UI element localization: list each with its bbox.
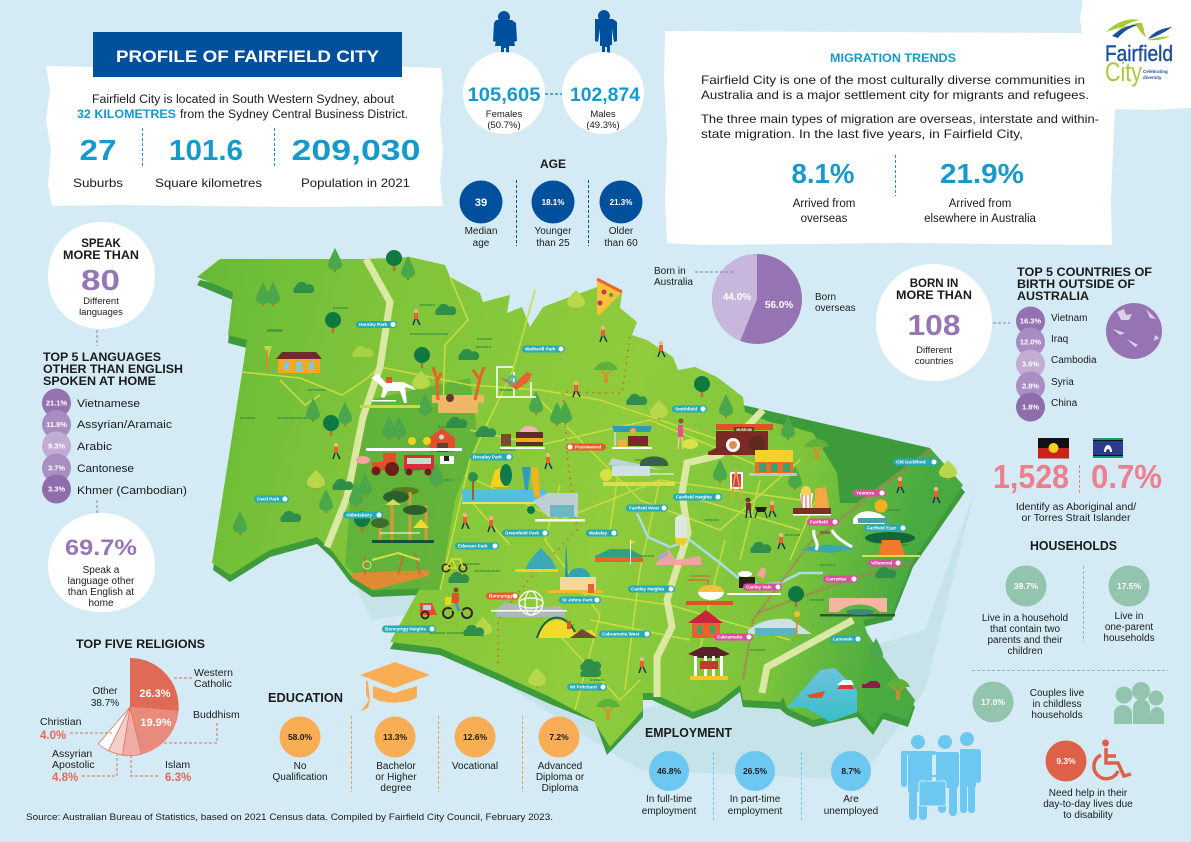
label: assyrian apostolic: [52, 748, 95, 784]
location labels: St Johns Park: [562, 598, 593, 603]
migration text: state migration. In the last five years, in Fairfield City,: [701, 127, 1023, 141]
stat: full-time: employment: [642, 806, 696, 817]
stat: square kilometres: 101.6: [169, 135, 243, 167]
stat: two parents: Live in a household: [982, 613, 1068, 624]
panel: 69.7% speak another language: 69.7%: [65, 535, 137, 560]
panel: females: Females: [486, 109, 522, 120]
language circles: 21.1%: [46, 398, 67, 408]
panel: born in more than 108 countries: MORE THAN: [896, 290, 972, 302]
heading: top 5 countries: AUSTRALIA: [1017, 291, 1089, 303]
illustration: wire sphere sculpture: [491, 591, 567, 617]
stat: arrived from elsewhere: [924, 158, 1037, 225]
older than 60: [600, 180, 642, 249]
location labels: Greenfield Park: [505, 531, 539, 536]
stat: one parent: one-parent: [1105, 622, 1153, 633]
location labels: Horsley Park: [359, 322, 388, 327]
icon: workers: [901, 732, 981, 820]
panel: males: Males: [590, 109, 616, 120]
stat: childless couples: 17.0%: [981, 697, 1005, 707]
panel: females: (50.7%): [487, 120, 521, 131]
illustration: tractor and trailer: [356, 453, 454, 476]
panel: born in more than 108 countries: [876, 264, 992, 381]
illustration: barbecue man: [746, 498, 767, 518]
stat: disability: [1043, 740, 1133, 821]
stat: disability: 9.3%: [1056, 756, 1076, 766]
illustration: heritage house: [264, 346, 322, 373]
label: born in Australia: Australia: [654, 277, 693, 288]
icon: woman: [493, 11, 517, 60]
older than 60: than 60: [604, 238, 638, 249]
stat: one parent: households: [1103, 633, 1155, 644]
intro text: Fairfield City is located in South Western Sydney, about: [92, 94, 395, 106]
country names: [1051, 313, 1097, 409]
illustration: pyramid pavilion: [515, 548, 558, 572]
label: born overseas: [815, 292, 856, 314]
location labels: Villawood: [871, 561, 893, 566]
heading: top 5 countries: TOP 5 COUNTRIES OF: [1017, 267, 1152, 279]
illustration: white building: [853, 500, 888, 524]
heading: households: HOUSEHOLDS: [1030, 539, 1117, 553]
migration text: [701, 73, 1099, 141]
illustration: Chinese gate: [688, 647, 730, 680]
younger than 25: Younger: [535, 226, 572, 237]
stat: advanced diploma: Diploma or: [536, 772, 585, 783]
heading: religions: TOP FIVE RELIGIONS: [76, 637, 205, 651]
illustration: barn: [366, 428, 462, 452]
location labels: Old Guildford: [896, 460, 926, 465]
illustration: water park: [462, 464, 546, 504]
location labels: Fairfield: [810, 520, 828, 525]
stat: arrived from elsewhere: elsewhere in Australia: [924, 213, 1037, 225]
stat: population: Population in 2021: [301, 176, 410, 190]
age section: [460, 157, 642, 249]
heading: top 5 countries: [1017, 267, 1152, 303]
stat: childless couples: [972, 682, 1085, 722]
stat: advanced diploma: Advanced: [538, 761, 582, 772]
intro text: 32 KILOMETRES: [77, 109, 176, 121]
illustration: museum: [708, 424, 773, 455]
country circles: 16.3%: [1020, 316, 1041, 326]
illustration: modern pavilion: [600, 456, 675, 486]
heading: top 5 languages: [43, 352, 183, 388]
stat: childless couples: in childless: [1033, 699, 1081, 710]
trees: [233, 248, 957, 720]
country names: Iraq: [1051, 334, 1068, 345]
language names: Khmer (Cambodian): [77, 485, 187, 497]
illustration: fountain slides: [800, 530, 855, 553]
lake and boats: [787, 668, 880, 722]
illustration: cake and coffee: [500, 426, 545, 449]
location labels: [254, 321, 938, 690]
label: christian: [40, 716, 82, 742]
logo: Fairfield City: Celebrating: [1143, 69, 1168, 74]
label: islam: 6.3%: [165, 772, 191, 784]
panel: Aboriginal and Torres Strait Islander: [993, 438, 1162, 524]
heading: education: EDUCATION: [268, 691, 343, 705]
stat: part-time: [728, 751, 782, 817]
illustration: playground: [352, 553, 430, 590]
location labels: Cabramatta West: [602, 632, 640, 637]
river: [637, 513, 823, 585]
heading: top 5 languages: TOP 5 LANGUAGES: [43, 352, 161, 364]
panel: top 5 countries of birth: [1016, 267, 1162, 422]
label: born overseas: Born: [815, 292, 836, 303]
label: western catholic: Catholic: [194, 678, 232, 690]
panel: born in more than 108 countries: BORN IN: [910, 278, 958, 290]
stat: no qualification: 58.0%: [288, 732, 312, 742]
icon: family: [1114, 682, 1164, 724]
stat: arrived from overseas: [792, 158, 855, 225]
location labels: Edensor Park: [458, 544, 488, 549]
label: assyrian apostolic: Apostolic: [52, 759, 95, 771]
location labels: Prairiewood: [575, 445, 601, 450]
location labels: Mt Pritchard: [570, 685, 597, 690]
red walking track: [498, 337, 630, 668]
panel: speak more than 80 languages: 80: [81, 265, 120, 297]
runners and players: [333, 309, 940, 673]
median age: 39: [475, 197, 487, 209]
stat: arrived from elsewhere: 21.9%: [940, 158, 1024, 189]
illustration: gym frame: [496, 367, 536, 397]
location labels: Smithfield: [675, 407, 697, 412]
label: christian: 4.0%: [40, 730, 66, 742]
panel: profile of Fairfield City: [46, 32, 443, 207]
label: other: [91, 686, 119, 709]
illustration: market hall: [595, 540, 643, 564]
heading: top 5 languages: SPOKEN AT HOME: [43, 376, 156, 388]
illustration: popcorn and burrito: [793, 486, 831, 516]
location labels: Bossley Park: [473, 455, 502, 460]
heading: employment: EMPLOYMENT: [645, 726, 732, 740]
pie chart: religions: 26.3%: [139, 688, 171, 700]
stat: suburbs: [73, 135, 123, 190]
panel: 69.7% speak another language: than English at: [68, 587, 134, 598]
icon: graduation cap: [360, 662, 430, 711]
stat: one parent: [1103, 566, 1155, 644]
label: western catholic: [194, 667, 233, 690]
illustration: modern building: [527, 493, 585, 522]
language names: Cantonese: [77, 463, 134, 475]
panel: speak more than 80 languages: Different: [83, 296, 119, 307]
location labels: Lansvale: [833, 637, 853, 642]
title banner: [93, 32, 402, 77]
label: born overseas: overseas: [815, 303, 856, 314]
illustration: hill and gardener: [537, 618, 597, 638]
pie chart: religions: [98, 658, 179, 756]
stat: bachelor or higher: Bachelor: [376, 761, 416, 772]
stat: bachelor or higher: [374, 716, 417, 794]
stat: unemployed: Are: [843, 794, 859, 805]
stat: advanced diploma: 7.2%: [549, 732, 569, 742]
logo: Fairfield City: [1105, 19, 1173, 87]
dark farmland band: [345, 378, 478, 590]
illustration: wine glass and sculptures: [655, 515, 702, 565]
language circles: 9.3%: [48, 442, 65, 450]
country names: Vietnam: [1051, 313, 1088, 324]
stat: unemployed: 8.7%: [841, 766, 861, 776]
stat: part-time: In part-time: [730, 794, 781, 805]
illustration: mosque: [548, 542, 603, 593]
illustration: horse and rider: [360, 374, 420, 408]
stat: population: [292, 135, 420, 190]
logo: Fairfield City: diversity: [1143, 75, 1162, 80]
stat: disability: Need help in their: [1049, 788, 1128, 799]
stat: arrived from overseas: Arrived from: [793, 198, 855, 210]
heading: top 5 languages: OTHER THAN ENGLISH: [43, 364, 183, 376]
country circles: 3.6%: [1022, 360, 1039, 368]
heading: age: AGE: [540, 157, 566, 171]
younger than 25: [532, 180, 574, 249]
label: western catholic: Western: [194, 667, 233, 679]
location labels: Canley Vale: [746, 585, 772, 590]
stat: arrived from overseas: 8.1%: [792, 158, 855, 189]
map shadow: [350, 490, 975, 780]
intro text: from the Sydney Central Business District.: [180, 109, 408, 121]
older than 60: 21.3%: [610, 198, 632, 207]
stat: part-time: employment: [728, 806, 782, 817]
stat: bachelor or higher: 13.3%: [383, 732, 407, 742]
label: born in Australia: [654, 266, 693, 288]
country names: Syria: [1051, 377, 1074, 388]
panel: speak more than 80 languages: languages: [79, 307, 123, 318]
location labels: Fairfield West: [629, 506, 660, 511]
location labels: Fairfield Heights: [676, 495, 712, 500]
illustration: stadium: [748, 611, 812, 637]
panel: males: (49.3%): [586, 120, 620, 131]
location labels: Carramar: [826, 577, 847, 582]
stat: disability: to disability: [1063, 810, 1113, 821]
stat: bachelor or higher: or Higher: [375, 772, 417, 783]
stat: suburbs: Suburbs: [73, 176, 123, 190]
stat: no qualification: No: [294, 761, 307, 772]
panel: born in more than 108 countries: Different: [916, 345, 952, 356]
stat: vocational: [452, 716, 498, 772]
stat: part-time: 26.5%: [743, 766, 767, 776]
stat: one parent: 17.5%: [1117, 581, 1141, 591]
map: Fairfield City: [197, 248, 975, 780]
icon: Torres Strait Islander flag: [1093, 438, 1123, 458]
migration text: The three main types of migration are overseas, interstate and within-: [701, 112, 1099, 126]
country names: China: [1051, 398, 1078, 409]
panel: males: [562, 10, 644, 134]
railway: [743, 450, 930, 680]
illustration: cyclist and trailer: [420, 588, 472, 618]
panel: 69.7% speak another language: language other: [68, 576, 135, 587]
label: assyrian apostolic: 4.8%: [52, 772, 78, 784]
country circles: 2.8%: [1022, 382, 1039, 390]
illustration: steam train: [727, 567, 781, 595]
pie chart: birthplace: 56.0%: [765, 300, 793, 311]
language names: Vietnamese: [77, 398, 140, 410]
panel: 69.7% speak another language: Speak a: [83, 565, 120, 576]
illustration: red pagoda: [688, 610, 723, 638]
stat: two parents: [982, 566, 1068, 657]
label: born in Australia: Born in: [654, 266, 686, 277]
panel: females: [463, 11, 545, 134]
country circles: [1016, 306, 1045, 422]
panel: top five religions: [40, 637, 240, 784]
minor roads: [242, 277, 820, 710]
stat: suburbs: 27: [80, 135, 116, 167]
country names: Cambodia: [1051, 355, 1097, 366]
stat: full-time: 46.8%: [657, 766, 681, 776]
illustration: bicycle: [442, 559, 467, 572]
migration text: Australia and is a major settlement city for migrants and refugees.: [701, 88, 1089, 102]
location labels: Canley Heights: [631, 587, 665, 592]
stat: childless couples: households: [1031, 710, 1083, 721]
stat: unemployed: unemployed: [824, 806, 878, 817]
intro text: [77, 94, 408, 121]
map thick edge: [197, 280, 965, 755]
illustration: pink bridge: [820, 598, 895, 616]
motorways: [327, 259, 853, 697]
panel: born in more than 108 countries: 108: [908, 310, 960, 342]
panel: Aboriginal and Torres Strait Islander: Identify as Aboriginal and/: [1016, 501, 1136, 513]
stat: arrived from overseas: overseas: [801, 213, 848, 225]
location labels: Wakeley: [589, 531, 608, 536]
language names: [77, 398, 187, 497]
younger than 25: than 25: [536, 238, 570, 249]
stat: vocational: Vocational: [452, 761, 498, 772]
logo: Fairfield City: Fairfield: [1105, 41, 1173, 66]
country circles: 1.8%: [1022, 402, 1039, 412]
stat: population: 209,030: [292, 135, 420, 167]
stat: square kilometres: [155, 135, 262, 190]
stat: two parents: parents and their: [987, 635, 1063, 646]
stat: no qualification: [272, 716, 328, 783]
panel: Aboriginal and Torres Strait Islander: 0.7%: [1091, 458, 1162, 495]
heading: top 5 countries: BIRTH OUTSIDE OF: [1017, 279, 1135, 291]
illustration: pizza: [597, 279, 622, 315]
stat: unemployed: [824, 751, 878, 817]
stat: one parent: Live in: [1115, 611, 1143, 622]
panel: Aboriginal and Torres Strait Islander: or Torres Strait Islander: [1022, 512, 1131, 524]
illustration: noodle bowl: [686, 576, 733, 605]
panel: education: [268, 662, 585, 794]
icon: wheelchair: [1094, 740, 1131, 779]
stat: full-time: [642, 751, 696, 817]
stat: advanced diploma: Diploma: [542, 783, 579, 794]
heading: migration trends: MIGRATION TRENDS: [830, 51, 956, 65]
source note: Source: Australian Bureau of Statistics, based on 2021 Census data. Compiled by Fairfield City Council, February 2023.: [26, 812, 553, 823]
stat: full-time: In full-time: [646, 794, 692, 805]
panel: households: [972, 539, 1168, 821]
illustration: museum: MUSEUM: [736, 428, 752, 432]
language names: Assyrian/Aramaic: [77, 419, 173, 431]
pie chart: birthplace: 44.0%: [723, 292, 751, 303]
location labels: Bonnyrigg: [489, 594, 512, 599]
logo: Fairfield City: City: [1105, 57, 1142, 87]
stat: disability: day-to-day lives due: [1043, 799, 1133, 810]
stat: two parents: children: [1007, 646, 1043, 657]
panel: born in more than 108 countries: countries: [915, 356, 954, 367]
panel: Aboriginal and Torres Strait Islander: 1,528: [993, 458, 1069, 495]
illustration: orange baobab tree: [862, 532, 920, 557]
label: christian: Christian: [40, 716, 82, 728]
label: islam: Islam: [165, 759, 190, 771]
location labels: Bonnyrigg Heights: [385, 627, 427, 632]
stat: no qualification: Qualification: [272, 772, 328, 783]
panel: employment: [642, 726, 981, 820]
language circles: 3.7%: [48, 464, 65, 472]
illustration: heritage shopfront: [749, 450, 797, 476]
illustration: woman with selfie: [678, 418, 698, 449]
location labels: Cecil Park: [257, 497, 280, 502]
label: other: Other: [92, 686, 118, 697]
illustration: market stall: [612, 426, 652, 449]
illustration: antler sculpture: [432, 367, 484, 413]
stat: childless couples: Couples live: [1030, 688, 1085, 699]
stat: arrived from elsewhere: Arrived from: [949, 198, 1011, 210]
language circles: 3.3%: [48, 484, 65, 494]
country circles: 12.0%: [1020, 338, 1041, 346]
stat: bachelor or higher: degree: [380, 783, 412, 794]
language names: Arabic: [77, 441, 113, 453]
panel: 69.7% speak another language: [48, 513, 155, 612]
stat: two parents: that contain two: [990, 624, 1060, 635]
illustration: easel: [730, 470, 743, 500]
panel: speak more than 80 languages: SPEAK: [81, 238, 122, 250]
median age: [460, 180, 502, 249]
location labels: Cabramatta: [717, 635, 743, 640]
language circles: [42, 388, 71, 504]
stat: two parents: 39.7%: [1014, 581, 1038, 591]
pie chart: religions: 19.9%: [140, 717, 172, 729]
grass ticks: [240, 305, 909, 680]
label: islam: [165, 759, 191, 784]
panel: speak more than 80 languages: [48, 222, 155, 329]
map land: [197, 257, 963, 747]
location labels: Abbotsbury: [346, 513, 372, 518]
older than 60: Older: [609, 226, 634, 237]
icon: man: [595, 10, 617, 62]
location labels: Fairfield East: [867, 526, 896, 531]
icon: globe: [1106, 303, 1162, 359]
label: assyrian apostolic: Assyrian: [52, 748, 92, 760]
label: other: 38.7%: [91, 698, 119, 709]
panel: females: 105,605: [468, 85, 541, 106]
icon: Aboriginal flag: [1038, 438, 1069, 458]
panel: 69.7% speak another language: home: [88, 598, 114, 609]
location labels: Wetherill Park: [525, 347, 556, 352]
stat: advanced diploma: [536, 716, 585, 794]
illustration: treetop adventure: [371, 487, 434, 543]
panel: born overseas pie: [654, 254, 856, 344]
panel: speak more than 80 languages: MORE THAN: [63, 250, 139, 262]
location labels: Yennora: [856, 491, 875, 496]
median age: age: [473, 238, 490, 249]
pie chart: birthplace: [712, 254, 802, 344]
label: buddhism: Buddhism: [193, 709, 240, 721]
panel: top 5 languages: [42, 352, 187, 504]
median age: Median: [465, 226, 497, 237]
title: PROFILE OF FAIRFIELD CITY: [116, 47, 380, 66]
panel: males: 102,874: [570, 85, 640, 106]
younger than 25: 18.1%: [542, 198, 564, 207]
stat: square kilometres: Square kilometres: [155, 176, 262, 190]
stat: vocational: 12.6%: [463, 732, 487, 742]
language circles: 11.9%: [46, 420, 67, 429]
migration text: Fairfield City is one of the most culturally diverse communities in: [701, 73, 1085, 87]
panel: migration trends and logo background: [664, 0, 1191, 245]
